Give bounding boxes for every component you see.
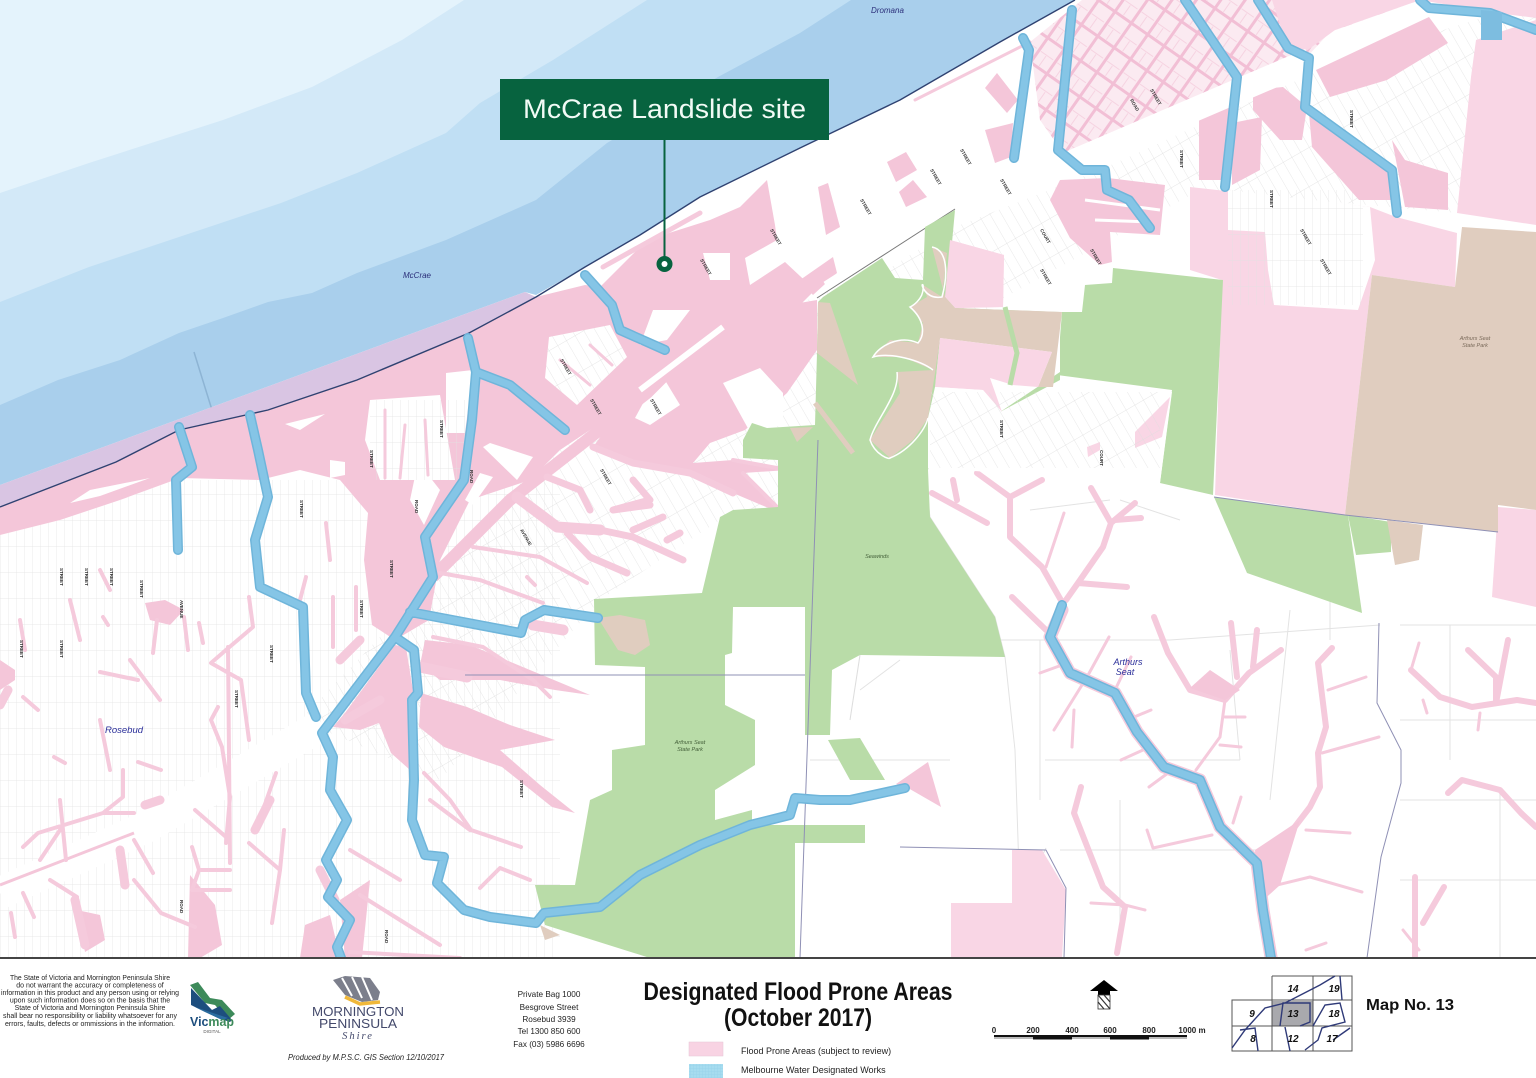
Vicmap logo (190, 982, 235, 1034)
flood prone areas: large pink parcels (935, 0, 1536, 958)
street name labels: STREET (1039, 268, 1052, 286)
street name labels: STREET (109, 568, 114, 586)
disclaimer text: do not warrant the accuracy or completeness of (16, 982, 164, 990)
map place labels: State Park (1462, 343, 1488, 349)
water: Port Phillip Bay tonal bands (0, 0, 1075, 485)
street name labels: STREET (859, 198, 872, 216)
key map: 12 (1287, 1034, 1299, 1045)
map place labels: Arthurs Seat (674, 740, 706, 746)
street name labels: STREET (1269, 190, 1274, 208)
street name labels: STREET (389, 560, 394, 578)
disclaimer text: errors, faults, defects or ommissions in the information. (5, 1021, 175, 1028)
legend: Flood Prone Areas (subject to review) (741, 1046, 891, 1056)
address block: Rosebud 3939 (522, 1015, 576, 1024)
street name labels: ROAD (179, 900, 184, 914)
street name labels: STREET (599, 468, 612, 486)
key map: 19 (1328, 984, 1340, 995)
flood prone areas: north-east suburban blocks (818, 0, 1448, 265)
boundary lines (465, 440, 1498, 958)
map place labels: Seawinds (865, 554, 889, 560)
key map: 14 (1287, 984, 1299, 995)
street name labels: AVENUE (179, 600, 184, 618)
state park land: brown areas (540, 227, 1536, 940)
map number: Map No. 13 (1366, 997, 1454, 1014)
street name labels: STREET (299, 500, 304, 518)
Mornington Peninsula Shire logo: PENINSULA (319, 1017, 398, 1031)
street name labels: STREET (999, 420, 1004, 438)
address block: Fax (03) 5986 6696 (513, 1040, 585, 1049)
legend (689, 1042, 891, 1078)
address block (513, 990, 585, 1049)
scale bar: 200 (1026, 1026, 1040, 1035)
address block: Private Bag 1000 (518, 990, 581, 999)
coastline (0, 0, 1075, 507)
street name labels: AVENUE (519, 528, 533, 546)
flood prone areas: Rosebud west (0, 523, 530, 958)
street name labels: STREET (999, 178, 1012, 196)
key map: 9 (1249, 1009, 1255, 1020)
street name labels: STREET (519, 780, 524, 798)
map place labels: Seat (1116, 667, 1135, 677)
map place labels: Dromana (871, 6, 904, 15)
street name labels: STREET (139, 580, 144, 598)
disclaimer text: State of Victoria and Mornington Peninsula Shire (15, 1005, 166, 1012)
street name labels: ROAD (384, 930, 389, 944)
map place labels: Arthurs (1112, 657, 1143, 667)
map place labels: State Park (677, 747, 703, 753)
street name labels: STREET (19, 640, 24, 658)
street name labels: STREET (589, 398, 602, 416)
street name labels: STREET (929, 168, 942, 186)
park reserves: green areas (535, 210, 1391, 958)
street name labels (19, 88, 1354, 944)
street name labels: STREET (1349, 110, 1354, 128)
street name labels: ROAD (414, 500, 419, 514)
street name labels: STREET (1149, 88, 1162, 106)
map place labels: Rosebud (105, 725, 144, 736)
street name labels: STREET (234, 690, 239, 708)
street name labels: STREET (699, 258, 712, 276)
disclaimer text (1, 975, 179, 1028)
flood prone areas: southern tentacles around the highway (333, 447, 788, 847)
key map: 8 (1250, 1034, 1256, 1045)
white residential blocks inside the pink belt (70, 253, 783, 525)
production credit: Produced by M.P.S.C. GIS Section 12/10/2017 (288, 1053, 445, 1062)
map title: (October 2017) (724, 1004, 872, 1032)
scale bar: 0 (992, 1026, 997, 1035)
disclaimer text: information in this product and any person using or relying (1, 990, 179, 997)
callout: McCrae Landslide site (500, 79, 829, 272)
disclaimer text: The State of Victoria and Mornington Peninsula Shire (10, 975, 170, 982)
street name labels: ROAD (469, 470, 474, 484)
flood prone areas: eastern creek network (896, 473, 1536, 957)
street name labels: STREET (439, 420, 444, 438)
street name labels: STREET (1319, 258, 1332, 276)
address block: Besgrove Street (520, 1003, 579, 1012)
street name labels: STREET (369, 450, 374, 468)
disclaimer text: upon such information does so on the basis that the (10, 998, 170, 1004)
map title: Designated Flood Prone Areas (644, 978, 952, 1006)
street name labels: STREET (59, 640, 64, 658)
Mornington Peninsula Shire logo (312, 976, 404, 1042)
legend: Melbourne Water Designated Works (741, 1065, 886, 1075)
street name labels: STREET (269, 645, 274, 663)
street name labels: COURT (1099, 450, 1104, 466)
street name labels: ROAD (1129, 98, 1140, 113)
street name labels: STREET (84, 568, 89, 586)
key map: 17 (1326, 1034, 1338, 1045)
map place labels: McCrae (403, 271, 432, 280)
footer panel (0, 957, 1536, 1078)
scale bar: 600 (1103, 1026, 1117, 1035)
scale bar: 400 (1065, 1026, 1079, 1035)
street name labels: STREET (649, 398, 662, 416)
street name labels: STREET (769, 228, 782, 246)
address block: Tel 1300 850 600 (518, 1027, 581, 1036)
street name labels: COURT (1039, 228, 1052, 245)
street name labels: STREET (1089, 248, 1102, 266)
north arrow (1090, 980, 1118, 1009)
key map (1232, 976, 1352, 1051)
Melbourne Water designated works: blue drains (176, 0, 1536, 958)
Mornington Peninsula Shire logo: MORNINGTON (312, 1005, 404, 1019)
road corridor and highway (0, 60, 1310, 893)
key map: 18 (1328, 1009, 1340, 1020)
map place labels: Arthurs Seat (1459, 336, 1491, 342)
Vicmap logo: Vicmap (190, 1014, 234, 1029)
Mornington Peninsula Shire logo: Shire (342, 1031, 374, 1042)
street name labels: STREET (559, 358, 572, 376)
Vicmap logo: DIGITAL (203, 1029, 221, 1034)
scale bar: 800 (1142, 1026, 1156, 1035)
map title (644, 978, 952, 1032)
flood prone areas: coastal McCrae and highway belt (0, 180, 837, 640)
street name labels: STREET (59, 568, 64, 586)
scale bar (992, 1026, 1206, 1040)
street name labels: STREET (359, 600, 364, 618)
disclaimer text: shall bear no responsibility or liability whatsoever for any (3, 1013, 177, 1020)
map place labels (105, 6, 1491, 753)
street name labels: STREET (1299, 228, 1312, 246)
foreshore purple band (0, 292, 536, 507)
street name labels: STREET (1179, 150, 1184, 168)
scale bar: 1000 m (1178, 1026, 1206, 1035)
key map: 13 (1287, 1009, 1299, 1020)
callout: McCrae Landslide site: McCrae Landslide site (523, 94, 806, 124)
street name labels: STREET (959, 148, 972, 166)
